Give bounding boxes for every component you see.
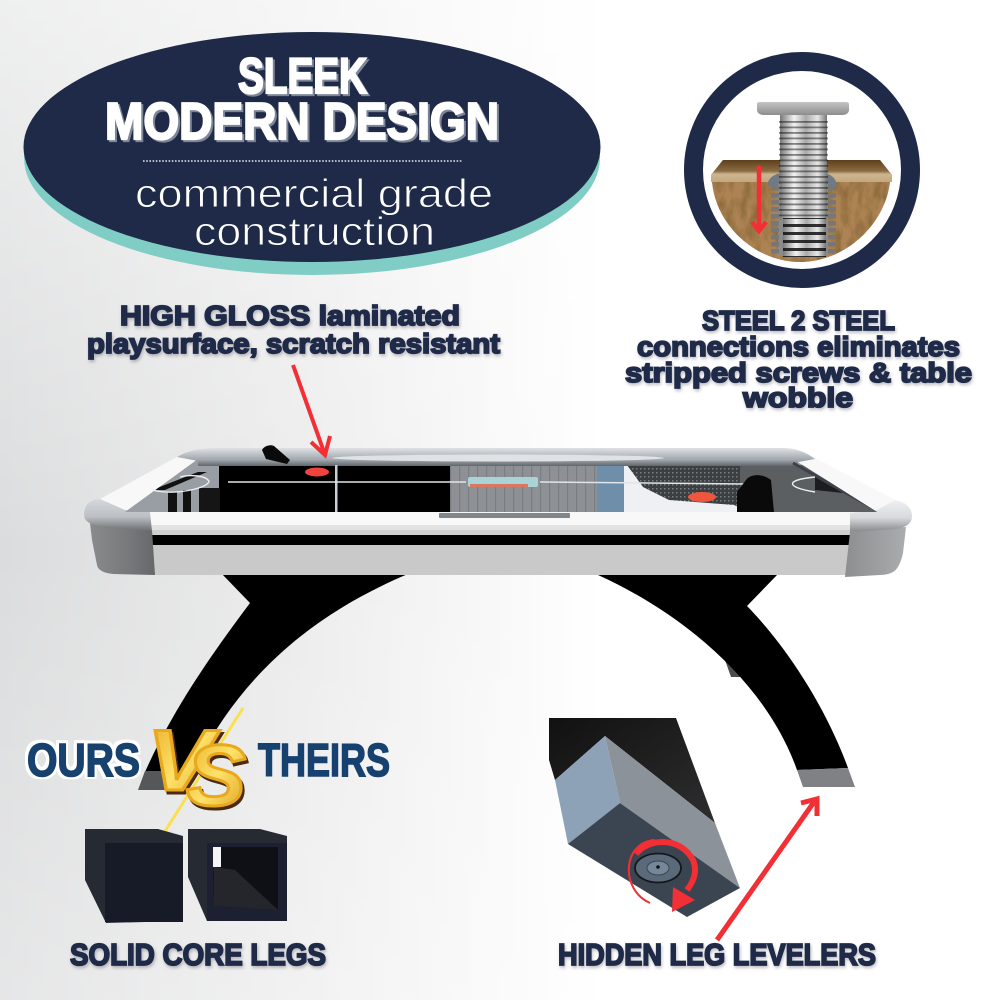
title <box>105 48 499 151</box>
arrow: to playsurface <box>293 365 330 455</box>
lightning line <box>162 708 243 836</box>
bottom face <box>568 803 740 917</box>
title: SLEEK <box>238 48 367 104</box>
ring <box>694 62 910 278</box>
blue face <box>555 736 620 844</box>
teal oval shadow <box>24 41 600 275</box>
subtitle <box>135 172 493 254</box>
left leg <box>138 574 408 790</box>
right goal slot <box>815 477 843 493</box>
text: steel 2 steel callout: stripped screws & table <box>625 357 972 388</box>
puck right <box>688 492 716 502</box>
arrow: to leg foot <box>717 799 817 940</box>
air hockey table <box>84 445 912 577</box>
hollow leg block <box>188 829 287 921</box>
right corner <box>845 500 912 577</box>
mallet left <box>262 445 290 464</box>
rotate arrow <box>629 840 695 912</box>
playfield <box>120 458 890 515</box>
text: high gloss callout <box>87 300 500 359</box>
ours label: OURS <box>27 734 140 786</box>
text: steel 2 steel callout: connections eliminates <box>637 331 960 362</box>
label: solid core legs: SOLID CORE LEGS <box>70 937 326 972</box>
left corner <box>84 499 155 575</box>
text: steel 2 steel callout <box>625 305 972 413</box>
scoreboard <box>439 513 570 518</box>
bolt <box>757 102 849 257</box>
right leg <box>598 575 855 787</box>
heading panel: sleek modern design oval <box>24 32 600 275</box>
theirs label: THEIRS <box>258 734 390 786</box>
leg leveler closeup <box>549 718 740 917</box>
rail top <box>84 448 912 531</box>
vs badge: S <box>186 728 246 824</box>
panel: ours vs theirs <box>27 708 390 923</box>
wood block <box>705 160 900 265</box>
text: high gloss callout: playsurface, scratch resistant <box>87 328 500 359</box>
text: steel 2 steel callout: wobble <box>742 382 853 413</box>
solid leg block <box>85 829 183 923</box>
badge: steel bolt in wood <box>694 62 910 278</box>
label: hidden leg levelers: HIDDEN LEG LEVELERS <box>558 937 876 972</box>
vs badge: V <box>147 713 221 809</box>
legs of table <box>138 574 855 790</box>
leveler disc <box>635 854 681 882</box>
navy oval <box>24 32 600 262</box>
goal arcs <box>152 476 815 492</box>
left goal slot <box>152 472 207 490</box>
vs badge <box>147 713 246 824</box>
front skirt <box>150 525 850 575</box>
subtitle: construction <box>194 210 435 254</box>
mallet right <box>737 475 774 512</box>
back reflection <box>332 454 664 462</box>
subtitle: commercial grade <box>135 172 493 216</box>
black leg section <box>549 718 715 823</box>
icon: down arrow <box>752 166 766 231</box>
title: MODERN DESIGN <box>105 93 499 151</box>
center logo <box>468 477 538 487</box>
text: high gloss callout: HIGH GLOSS laminated <box>120 300 460 331</box>
puck left <box>305 468 329 476</box>
text: steel 2 steel callout: STEEL 2 STEEL <box>702 305 895 336</box>
grey side face <box>605 736 740 888</box>
